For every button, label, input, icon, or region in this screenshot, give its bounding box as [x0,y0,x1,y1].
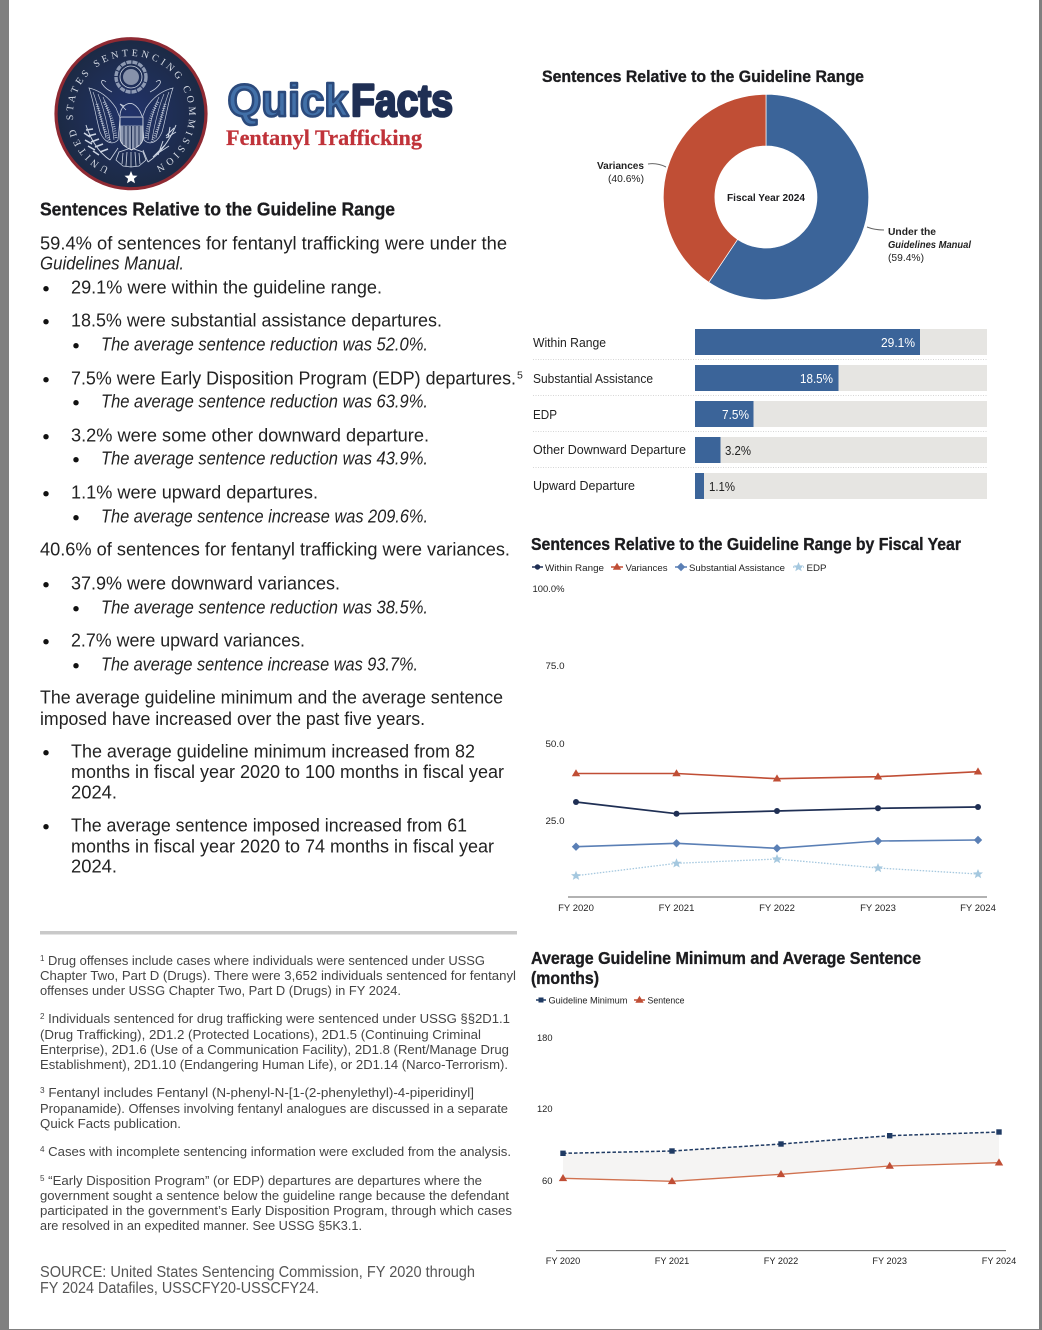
footnote 1: offenses under USSG Chapter Two, Part D (Drugs) in FY 2024. [40,983,401,998]
source: FY 2024 Datafiles, USSCFY20-USSCFY24. [40,1280,319,1297]
bar: within range: 29.1% [881,336,915,350]
y axis labels: 75.0 [546,661,564,672]
panel: footnotes [40,953,516,1297]
bar: EDP [533,401,987,427]
legend [532,562,826,574]
bar: upward departure: Upward Departure [533,479,635,493]
bullet list: variances [43,573,428,675]
y axis labels: 100.0% [532,584,565,595]
x axis [558,897,996,914]
panel: guideline minimum and sentence chart [531,948,1016,1266]
text block: trend statement [40,687,503,729]
y axis labels [532,584,565,827]
donut segment: variances 40.6% [663,94,766,282]
bullet list: trends: The average guideline minimum increased from 82 [71,741,475,762]
footnote 5: government sought a sentence below the guideline range because the defendant [40,1188,509,1203]
legend: Within Range [545,563,604,574]
footnote 1 [40,953,516,998]
gap area between series [563,1132,999,1181]
footnote 4: 4 [40,1145,45,1154]
bullet list: departures: The average sentence reduction was 52.0%. [101,334,428,355]
y axis labels: 180 [537,1033,552,1044]
bullet list: trends: months in fiscal year 2020 to 100 months in fiscal year [71,761,504,782]
footnote 2 [40,1011,510,1072]
footnote 1: 1 [40,954,45,963]
x axis: FY 2024 [960,903,996,914]
bar: substantial assistance: 18.5% [800,372,833,386]
footnote 3: Quick Facts publication. [40,1116,181,1131]
series: guideline minimum [560,1129,1002,1156]
bullet list: departures [43,277,523,527]
label: under the guidelines manual: (59.4%) [888,252,924,264]
heading: chart title: (months) [531,968,599,988]
title: QuickFacts wordmark: Facts [351,75,453,126]
footnote 5: are resolved in an expedited manner. See USSG §5K3.1. [40,1218,362,1233]
legend: Guideline Minimum [548,996,628,1006]
heading: line chart title: Sentences Relative to the Guideline Range by Fiscal Year [531,534,961,554]
x axis: FY 2023 [860,903,896,914]
x axis: FY 2024 [982,1256,1016,1266]
footnote 2: Establishment), 2D1.10 (Endangering Human Life), or 2D1.14 (Narco-Terrorism). [40,1057,508,1072]
y axis labels: 50.0 [546,739,564,750]
text block: trend statement: The average guideline minimum and the average sentence [40,687,503,708]
panel: narrative text [40,199,523,877]
x axis: FY 2020 [558,903,594,914]
bar: EDP: 7.5% [722,408,749,422]
bullet list: trends: 2024. [71,856,117,877]
x axis: FY 2022 [764,1256,798,1266]
bullet list: departures: The average sentence reduction was 43.9%. [101,448,428,469]
footnote 5: 5 [40,1174,45,1183]
source [40,1264,475,1297]
bar: within range: Within Range [533,336,606,350]
donut center label: Fiscal Year 2024 [727,192,805,204]
bullet list: trends: 2024. [71,782,117,803]
label: variances: (40.6%) [608,173,644,185]
text block: under the guidelines: 59.4% of sentences for fentanyl trafficking were under the [40,233,507,254]
panel: donut chart [542,67,972,300]
footnote 2: (Drug Trafficking), 2D1.2 (Protected Locations), 2D1.5 (Continuing Criminal [40,1027,481,1042]
label: under the guidelines manual [867,226,972,264]
panel: line chart by fiscal year [531,534,996,914]
x axis: FY 2023 [872,1256,907,1266]
text block: under the guidelines: Guidelines Manual. [40,253,184,274]
bar: within range [533,329,987,355]
footnote 3: Fentanyl includes Fentanyl (N-phenyl-N-[1-(2-phenylethyl)-4-piperidinyl] [45,1085,474,1100]
bullet list: trends: The average sentence imposed increased from 61 [71,815,467,836]
footnote 1: Drug offenses include cases where individuals were sentenced under USSG [44,953,485,968]
legend: Variances [626,563,668,574]
bullet list: variances: The average sentence reduction was 38.5%. [101,597,428,618]
y axis labels: 60 [542,1176,552,1187]
text block: trend statement: imposed have increased over the past five years. [40,708,425,729]
x axis: FY 2020 [546,1256,580,1266]
y axis labels: 25.0 [546,816,564,827]
bar: upward departure [533,473,987,499]
bullet list: variances: The average sentence increase was 93.7%. [101,654,418,675]
footnote 4: Cases with incomplete sentencing information were excluded from the analysis. [45,1144,511,1159]
bullet list: departures: The average sentence increase was 209.6%. [101,506,428,527]
label: variances: Variances [597,160,644,172]
series: substantial assistance [572,836,982,852]
footnote 3 [40,1085,508,1131]
series: EDP [571,854,983,880]
bullet list: departures: The average sentence reduction was 63.9%. [101,391,428,412]
footnote 5 [40,1173,512,1233]
bullet list: variances: 37.9% were downward variances. [71,573,340,594]
x axis: FY 2022 [759,903,795,914]
bullet list: departures: 7.5% were Early Disposition Program (EDP) departures. [71,368,516,389]
heading: chart title [531,948,921,988]
icon: United States Sentencing Commission seal: UNITED STATES SENTENCING COMMISSION [66,49,196,174]
bullet list: departures: 1.1% were upward departures. [71,482,318,503]
bar: substantial assistance: Substantial Assistance [533,372,653,386]
title: QuickFacts wordmark: Quick [228,75,349,126]
bullet list: departures: 5 [517,370,523,382]
footnote 2: 2 [40,1012,45,1021]
panel: departure bar chart [533,329,987,499]
label: under the guidelines manual: Under the [888,226,936,238]
footnote 3: Propanamide). Offenses involving fentanyl analogues are discussed in a separate [40,1101,508,1116]
label: variances [597,160,666,185]
legend [536,996,684,1006]
bar: EDP: EDP [533,408,557,422]
bar: other downward departure: Other Downward Departure [533,443,686,457]
legend: EDP [806,563,826,574]
footnote 5: “Early Disposition Program” (or EDP) departures are departures where the [45,1173,482,1188]
bullet list: variances: 2.7% were upward variances. [71,630,305,651]
heading: chart title: Average Guideline Minimum and Average Sentence [531,948,921,968]
title: QuickFacts wordmark [228,75,453,126]
bullet list: trends [43,741,504,877]
bullet list: departures: 18.5% were substantial assistance departures. [71,310,442,331]
series: variances [572,767,982,782]
x axis: FY 2021 [659,903,694,914]
footnote 3: 3 [40,1086,45,1095]
footnote 2: Enterprise), 2D1.6 (Use of a Communication Facility), 2D1.8 (Rent/Manage Drug [40,1042,509,1057]
footnote 1: Chapter Two, Part D (Drugs). There were 3,652 individuals sentenced for fentanyl [40,968,516,983]
y axis labels: 120 [537,1104,552,1115]
x axis: FY 2021 [655,1256,689,1266]
bullet list: trends: months in fiscal year 2020 to 74 months in fiscal year [71,836,494,857]
text block: under the guidelines [40,233,507,274]
x axis [546,1251,1016,1266]
subtitle: Fentanyl Trafficking: Fentanyl Trafficking [226,125,423,150]
source: SOURCE: United States Sentencing Commission, FY 2020 through [40,1264,475,1281]
y axis labels [537,1033,552,1187]
legend: Sentence [648,996,684,1006]
heading: sentences relative to guideline range: Sentences Relative to the Guideline Range [40,199,395,220]
legend: Substantial Assistance [689,563,785,574]
donut segment: under the guidelines manual 59.4% [709,94,869,300]
label: under the guidelines manual: Guidelines Manual [888,239,972,251]
text block: variances: 40.6% of sentences for fentanyl trafficking were variances. [40,539,510,560]
footnote 2: Individuals sentenced for drug trafficking were sentenced under USSG §§2D1.1 [44,1011,510,1026]
bar: other downward departure [533,437,987,463]
bar: upward departure: 1.1% [709,480,735,494]
bar: substantial assistance [533,365,987,391]
bullet list: departures: 3.2% were some other downward departure. [71,425,429,446]
heading: donut chart title: Sentences Relative to the Guideline Range [542,67,864,86]
bullet list: departures: 29.1% were within the guideline range. [71,277,382,298]
bar: other downward departure: 3.2% [725,444,751,458]
series: within range [573,799,981,817]
footnote 5: participated in the government’s Early Disposition Program, through which cases [40,1203,512,1218]
series: sentence [559,1158,1003,1184]
